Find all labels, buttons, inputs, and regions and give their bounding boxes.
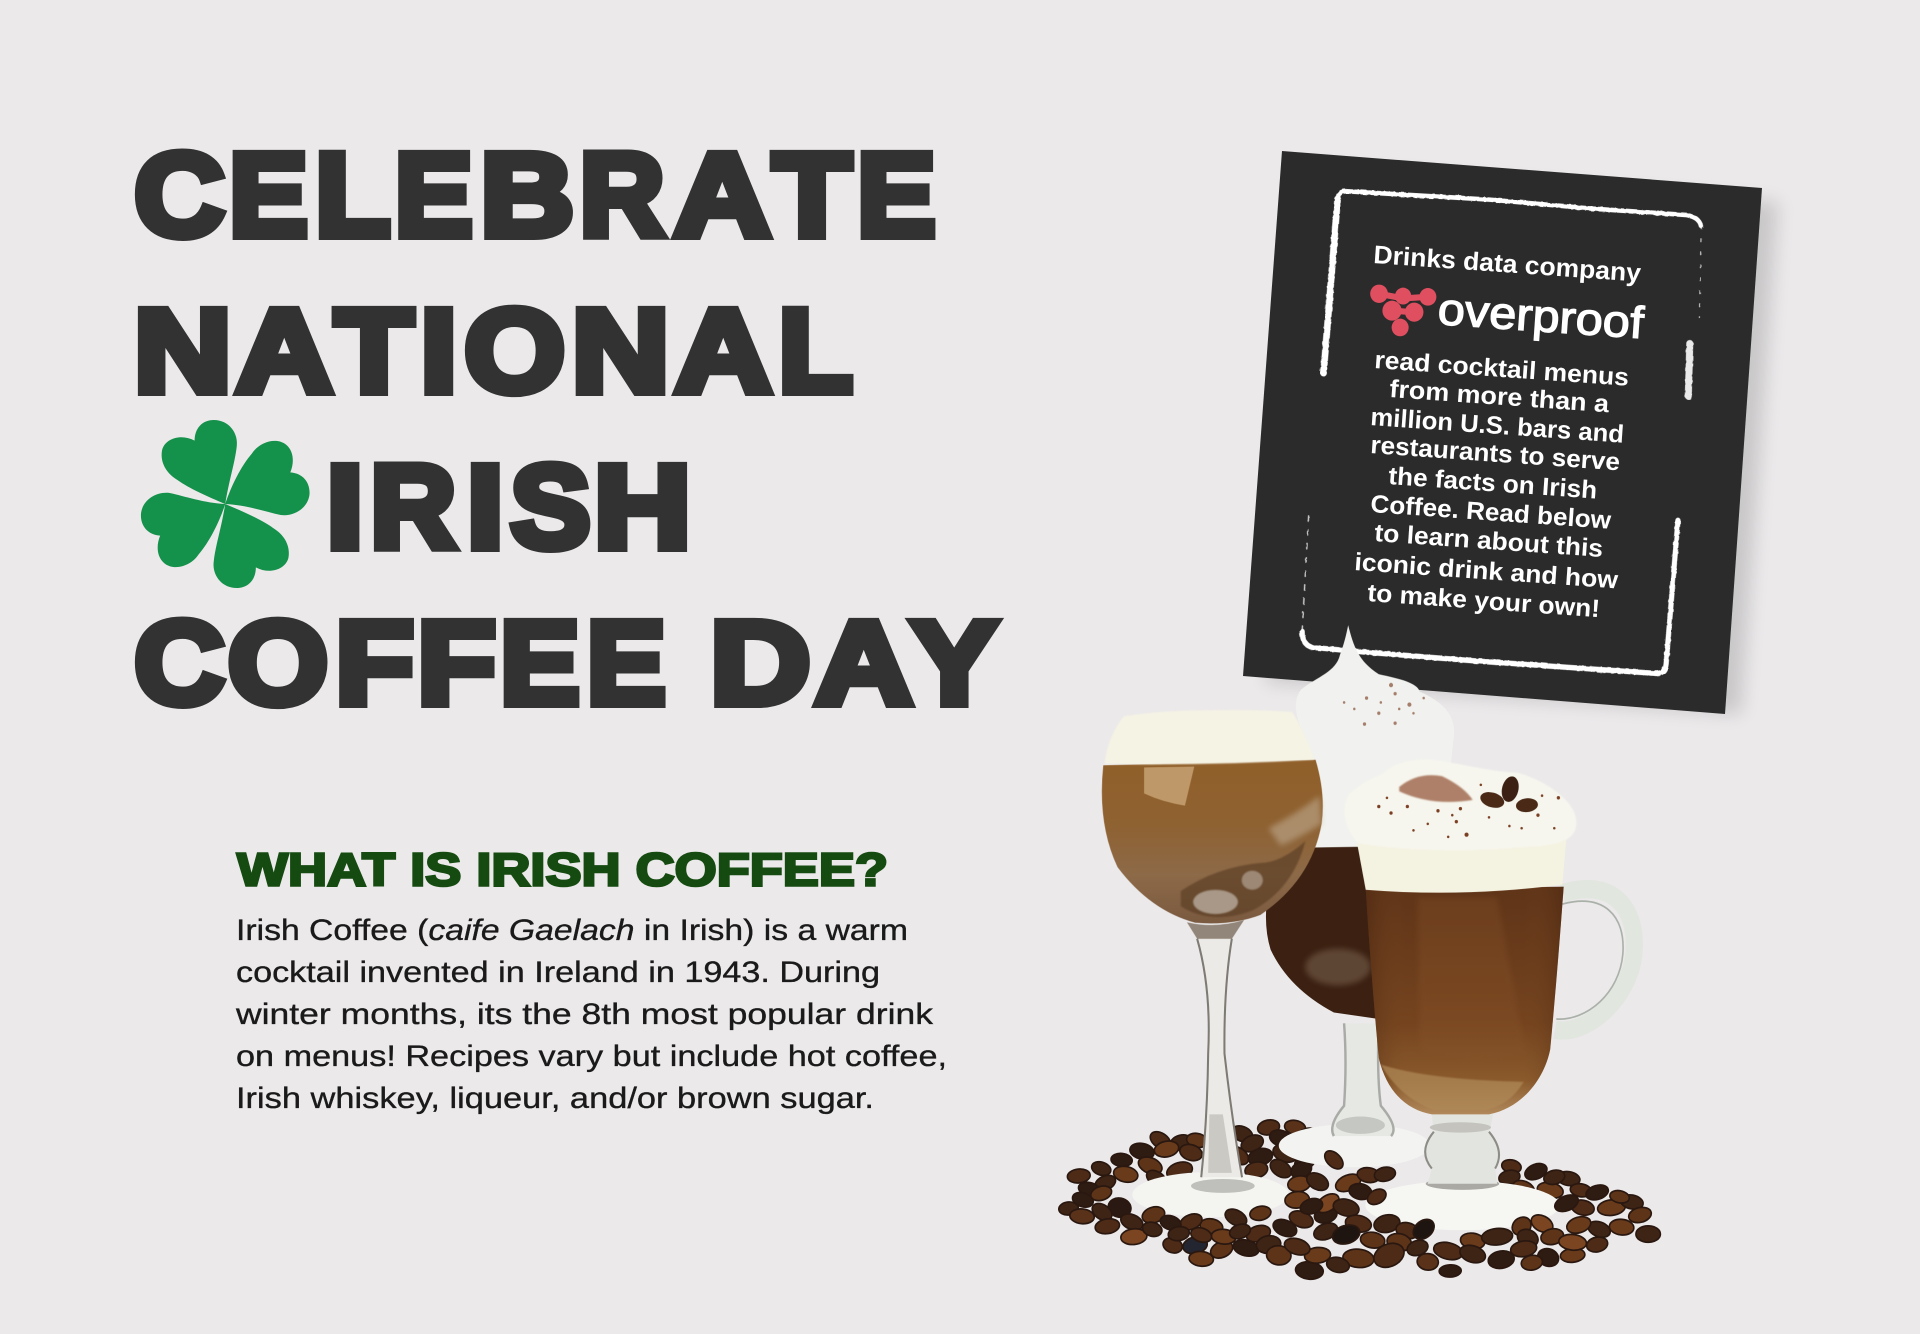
card body text: to make your own! [1367,579,1601,623]
icon: four-leaf clover [141,420,310,588]
card body text: read cocktail menus [1374,346,1630,392]
back coffee beans [1067,1118,1592,1216]
card body text: million U.S. bars and [1370,403,1625,449]
title line: celebrate: C [134,130,224,262]
card body text: from more than a [1389,375,1611,418]
title line: irish: S [510,442,590,574]
title line: national: A [236,286,332,418]
mug [1345,760,1634,1230]
title line: irish: I [467,442,504,574]
back glass foot and stem [1279,1124,1430,1167]
title line: irish: H [594,442,691,574]
panel: chalkboard card [1243,151,1778,714]
cocoa dusting [1399,775,1473,802]
title line: irish: I [327,442,363,574]
back glass foam [1296,625,1454,848]
wine glass foam [1104,710,1314,764]
wine glass [1102,710,1323,1217]
title [134,130,998,730]
card body text: iconic drink and how [1354,548,1619,594]
title line: celebrate: A [674,130,770,262]
mug handle [1555,889,1634,1031]
title line: celebrate: E [395,130,473,262]
card background [1243,151,1762,714]
wine glass foot [1132,1172,1289,1217]
title line: irish: R [370,442,456,574]
title line: coffee day: A [815,598,912,730]
body text: what is irish coffee: Irish whiskey, liqueur, and/or brown sugar. [236,1082,874,1115]
body text: what is irish coffee: cocktail invented in Ireland in 1943. During [236,956,880,989]
card lead-in text: Drinks data company [1373,241,1643,288]
logo mark: grape dots [1370,285,1436,336]
mug foam band [1356,837,1567,893]
mug foot [1365,1181,1560,1230]
title line: national: N [572,286,669,418]
back glass [1266,625,1454,1167]
title line: national: I [420,286,457,418]
title line: coffee day: C [134,598,224,730]
card body text [1354,346,1630,623]
mug coffee [1366,887,1564,1114]
card body text: restaurants to serve [1370,431,1621,476]
title line: national: O [464,286,565,418]
illustration: three irish coffee glasses on coffee beans [1058,625,1660,1280]
wine glass coffee [1102,760,1323,923]
title line: national: T [335,286,413,418]
chalk frame [1302,191,1701,673]
title line: celebrate: B [480,130,574,262]
heading: what is irish coffee: WHAT IS IRISH COFFEE? [237,844,888,896]
title line: coffee day: O [228,598,328,730]
title line: coffee day: F [336,598,414,730]
title line: coffee day: D [710,598,810,730]
card body text: the facts on Irish [1388,462,1598,505]
title line: celebrate: E [857,130,936,262]
title line: coffee day: Y [911,598,998,730]
title line: national: N [134,286,232,418]
body text: what is irish coffee: winter months, its the 8th most popular drink [235,998,934,1031]
overproof logo [1370,283,1646,348]
body text: what is irish coffee: Irish Coffee ( caife Gaelach in Irish) is a warm [236,914,908,947]
body text: what is irish coffee [235,914,947,1115]
wine glass stem [1197,939,1242,1177]
title line: celebrate: E [229,130,308,262]
title line: national: L [779,286,853,418]
title line: coffee day: F [418,598,496,730]
body text: what is irish coffee: on menus! Recipes vary but include hot coffee, [236,1040,947,1073]
back glass coffee [1266,846,1379,1019]
title line: celebrate: R [580,130,664,262]
title line: coffee day: E [587,598,666,730]
card body text: Coffee. Read below [1370,490,1613,535]
title line: celebrate: L [315,130,390,262]
coffee beans on foam [1479,774,1538,813]
logo wordmark: overproof [1436,283,1646,348]
mug stem [1425,1114,1499,1184]
card body text: to learn about this [1374,519,1604,563]
title line: national: A [675,286,772,418]
title line: coffee day: E [500,598,580,730]
title line: celebrate: T [773,130,851,262]
front coffee beans [1058,1147,1660,1280]
card shadow [1266,167,1778,714]
mug foam top [1345,760,1576,850]
